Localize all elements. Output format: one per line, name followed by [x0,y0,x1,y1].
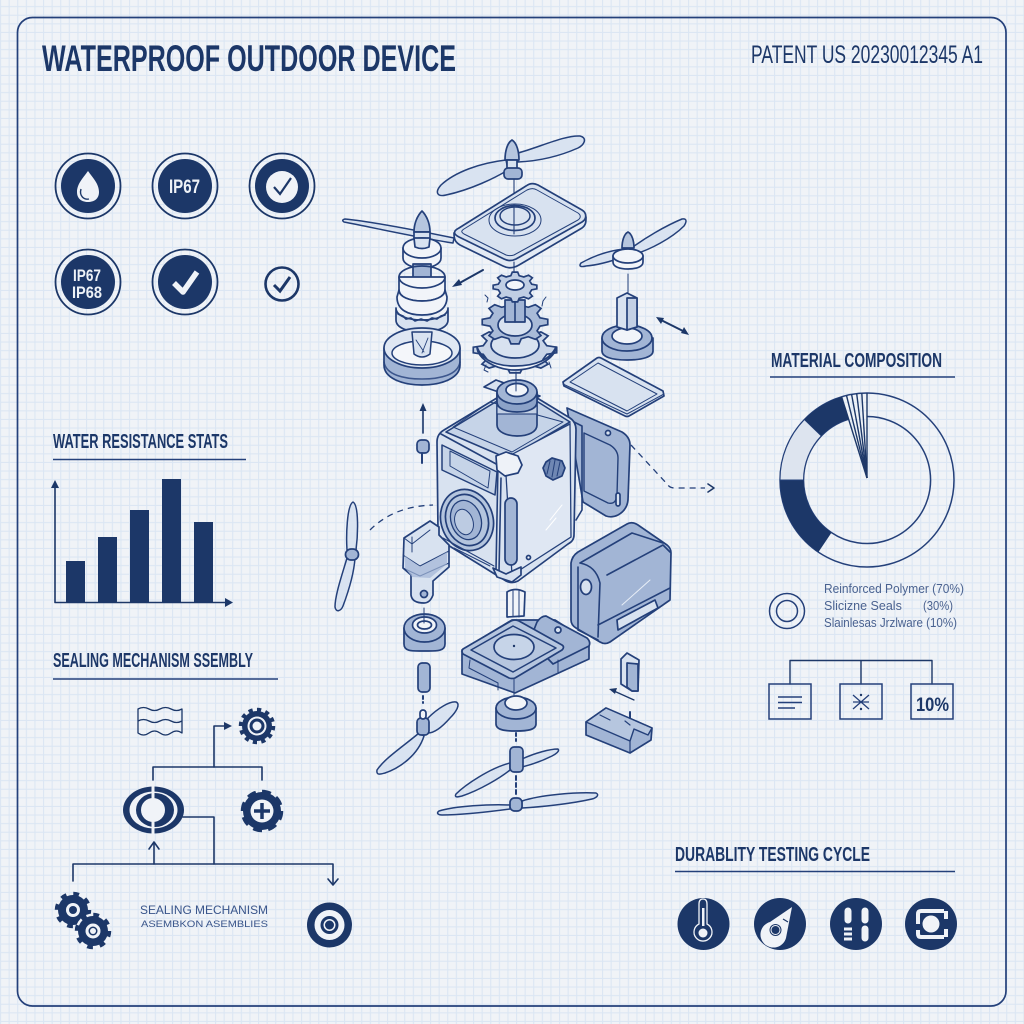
segment: dark [780,480,832,552]
lower coupling [496,696,536,741]
segment: dark top [804,397,848,436]
segment: striped wedge [842,393,867,478]
badge: check [152,250,218,314]
icon: double gears [58,894,110,948]
bar chart [51,479,233,607]
legend text: Slicizne Seals [824,599,902,613]
icon: thermometer [678,898,730,950]
box: star [840,684,882,719]
right propeller and shaft [580,219,686,360]
badge: water drop [56,154,120,218]
icon: target seal [307,902,352,948]
badge: IP67 IP68: IP68 [72,283,102,302]
legend text: Slainlesas Jrzlware (10%) [824,616,957,630]
mount cap [484,380,540,436]
device main body [433,388,582,582]
icon: fasteners [830,898,882,950]
legend text [824,582,964,630]
slotted block [586,708,652,753]
small bracket [621,653,639,691]
explode arrow left [452,270,483,287]
box: percent: 10% [916,695,949,716]
title: WATERPROOF OUTDOOR DEVICE [42,38,456,79]
icon: cycle frame [905,898,957,950]
badge: IP67 IP68: IP67 [73,266,101,285]
bottom propeller [438,793,598,815]
device back panel [567,408,630,517]
lower-left propeller [377,702,458,774]
far-left propeller [335,502,358,611]
heading: water resistance stats: WATER RESISTANCE STATS [53,431,228,453]
heading: sealing mechanism: SEALING MECHANISM SSEMBLY [53,650,253,672]
exploded device illustration [335,136,714,815]
icon: plus gear [242,792,282,830]
top cover plate [454,184,586,285]
material breakdown tree [769,660,953,719]
battery box [571,523,671,644]
icon: sealing ring [123,785,184,835]
mid-lower propeller [455,747,559,797]
bearing ring [404,608,445,651]
icon: gauge needle [754,898,806,950]
glass card [563,358,664,416]
box: percent [911,684,953,719]
legend text: (30%) [923,599,953,613]
heading: material composition: MATERIAL COMPOSITION [771,350,942,372]
dashed leader left [370,505,433,530]
segment: light [780,420,821,480]
icon: wave seal [138,708,182,735]
top propeller [437,136,584,222]
base housing [462,616,590,695]
panel: sealing diagram [58,708,352,948]
panel: certification badges [56,154,314,314]
legend text: Reinforced Polymer (70%) [824,582,964,596]
legend ring icon [770,594,804,628]
donut chart [780,393,954,567]
badge: IP67: IP67 [169,177,200,198]
dashed leader right with arrow [631,445,714,492]
panel: durability icons [678,898,957,950]
small pin and up arrow [417,403,429,463]
heading: durability testing cycle: DURABLITY TESTING CYCLE [675,844,870,866]
guide column [507,590,525,617]
caption: ASEMBKON ASEMBLIES [141,919,268,930]
connector lines [73,722,338,885]
double arrow right [656,317,689,335]
badge: check in disc [250,154,314,218]
badge: IP67 [152,154,218,218]
badge: IP67 IP68 [56,250,120,314]
slide arrow [609,688,634,700]
icon: gear top [242,710,272,742]
box: lines [769,684,811,719]
left propeller and bearing stack [343,211,460,385]
latch clip [403,521,449,603]
caption [140,903,268,930]
centre gear stack [473,272,557,388]
small cylinder [418,663,430,703]
badge: small check [266,268,298,300]
caption: SEALING MECHANISM [140,903,268,917]
